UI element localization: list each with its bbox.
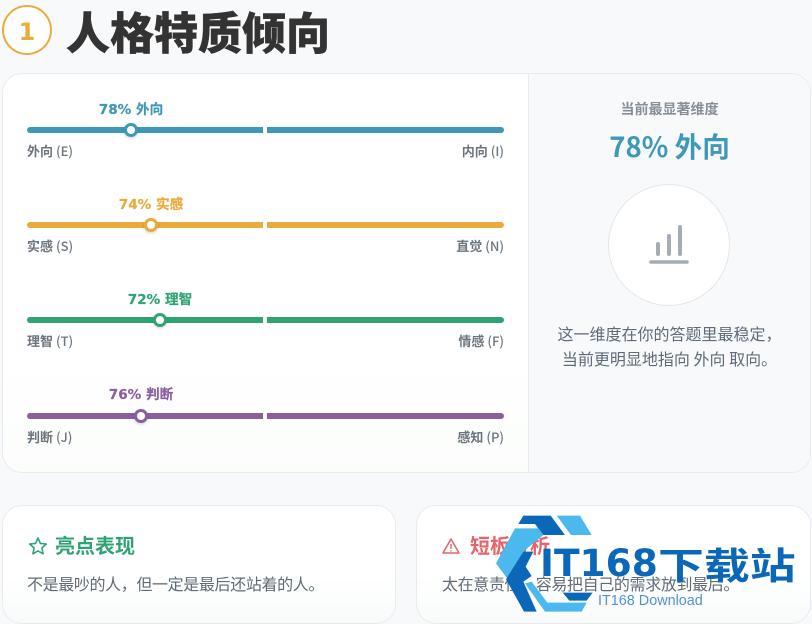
left pole label: 理智 (T) <box>27 331 73 350</box>
dominant dimension caption: 当前最显著维度 <box>620 99 718 119</box>
value label: 74% 实感 <box>119 196 183 212</box>
dominant dimension description: 这一维度在你的答题里最稳定， <box>557 321 782 345</box>
left pole label: 判断 (J) <box>27 427 72 446</box>
logo wordmark <box>540 536 796 590</box>
watermark logo <box>496 516 796 612</box>
icon: warning <box>442 538 460 554</box>
highlights heading: 亮点表现 <box>55 530 135 559</box>
value label: 78% 外向 <box>99 102 163 118</box>
right pole label: 感知 (P) <box>457 427 504 446</box>
section number badge <box>2 5 52 55</box>
slider bar <box>27 218 504 234</box>
dominant dimension description: 当前更明显地指向 外向 取向。 <box>562 346 777 370</box>
trait slider: judging <box>27 386 504 446</box>
dominant dimension description <box>557 321 782 370</box>
slider bar <box>27 408 504 426</box>
icon: bar chart in circle <box>608 184 730 306</box>
right pole label: 内向 (I) <box>462 141 504 160</box>
logo subtitle: IT168 Download <box>598 593 703 609</box>
left pole label: 实感 (S) <box>27 236 73 255</box>
icon: star <box>28 537 48 555</box>
icon: hexagon logo <box>496 516 593 612</box>
dominant dimension value: 78% 外向 <box>609 125 730 165</box>
logo wordmark: IT168 <box>540 541 658 585</box>
panel: dominant dimension background <box>528 74 812 472</box>
slider bar <box>27 122 504 140</box>
panel: trait card <box>2 73 811 473</box>
trait slider: sensing <box>27 196 504 255</box>
right pole label: 直觉 (N) <box>456 236 504 255</box>
trait slider: thinking <box>27 292 504 350</box>
trait slider: extraversion <box>27 102 504 160</box>
value label: 72% 理智 <box>128 292 192 308</box>
weaknesses heading: 短板分析 <box>470 530 550 559</box>
left pole label: 外向 (E) <box>27 141 73 160</box>
panel: weaknesses <box>416 505 811 624</box>
highlights text: 不是最吵的人，但一定是最后还站着的人。 <box>27 571 324 595</box>
value label: 76% 判断 <box>109 386 173 402</box>
section number badge: 1 <box>19 18 35 46</box>
panel: highlights <box>2 505 396 624</box>
logo wordmark: 下载站 <box>658 536 796 590</box>
weaknesses text: 太在意责任，容易把自己的需求放到最后。 <box>442 571 739 595</box>
slider bar <box>27 312 504 330</box>
right pole label: 情感 (F) <box>458 331 504 350</box>
